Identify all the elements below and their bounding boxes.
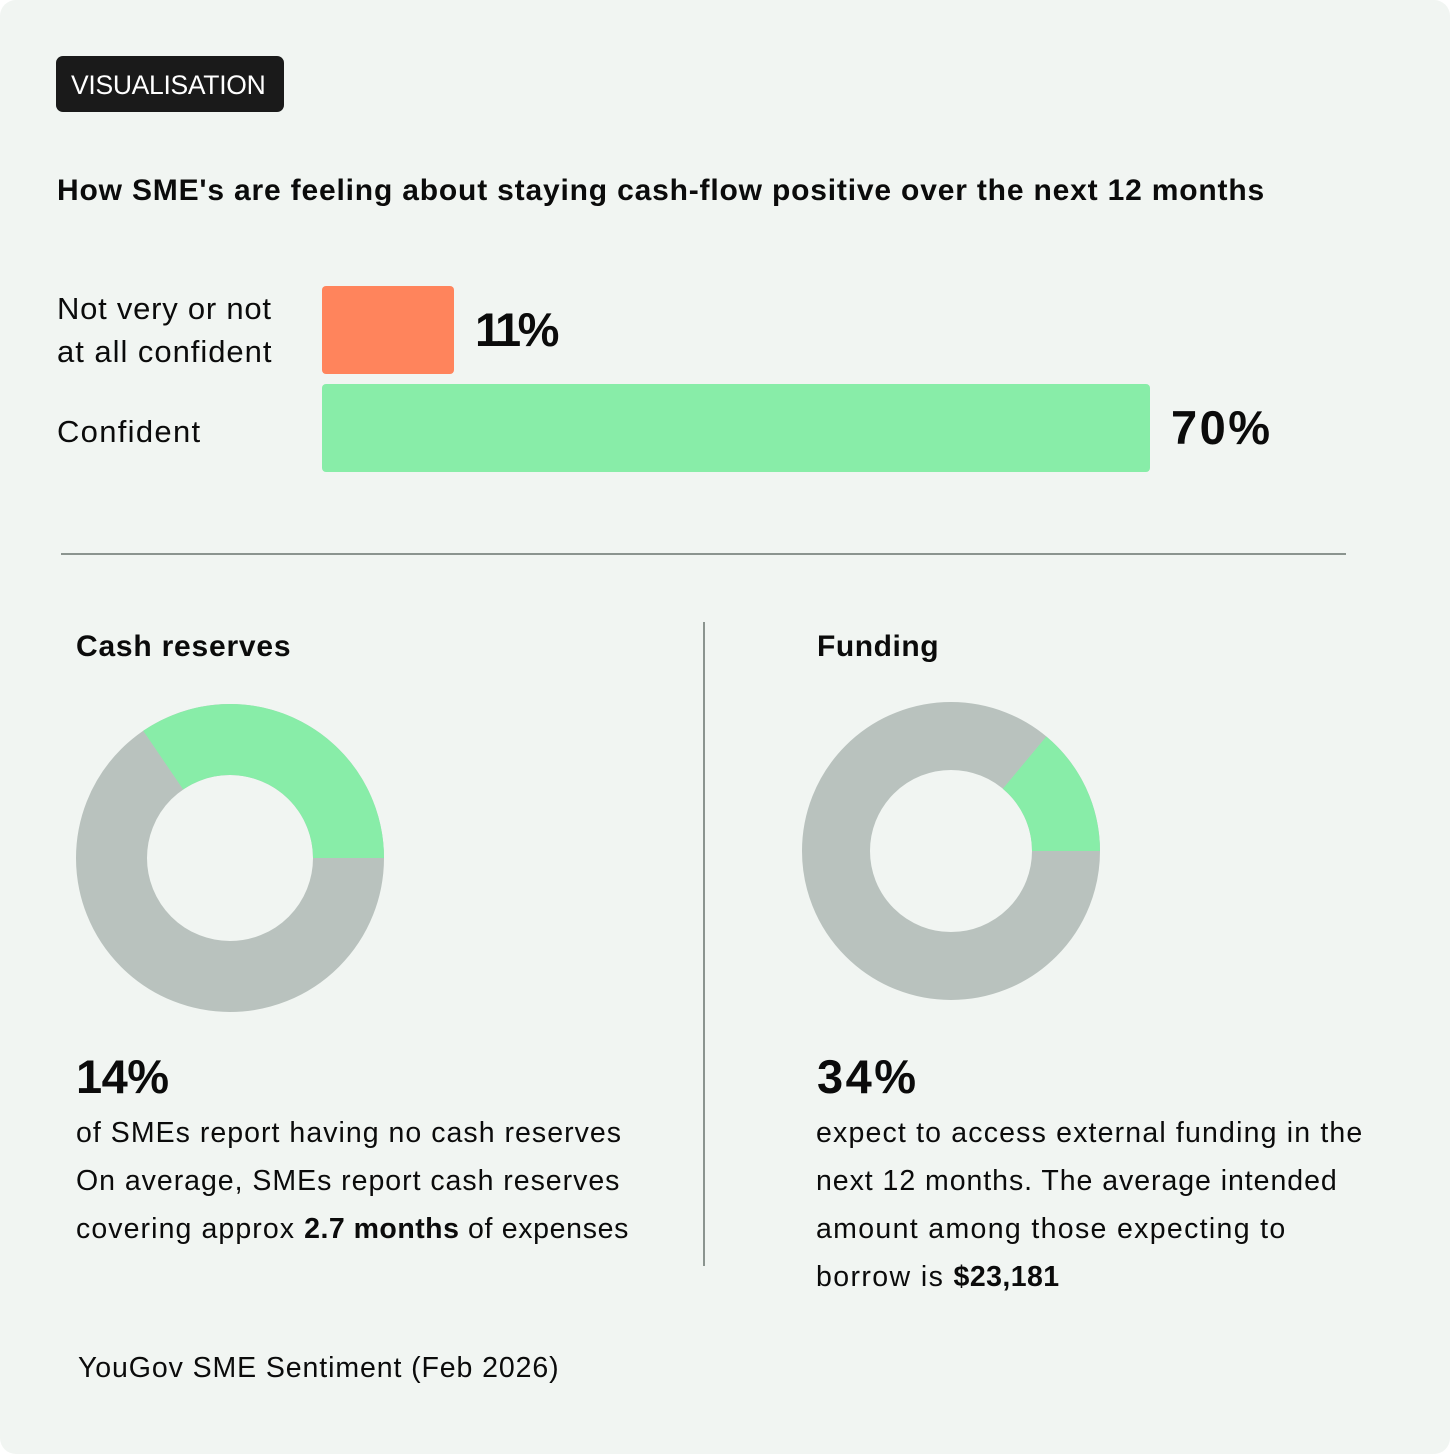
donut chart: cash reserves xyxy=(76,704,384,1012)
bar: not confident xyxy=(322,286,454,374)
value: 11%: 11% xyxy=(475,303,556,356)
text: cash reserves description xyxy=(76,1117,629,1245)
text: funding description: next 12 months. The average intended xyxy=(816,1165,1338,1197)
stat: 34%: 34% xyxy=(817,1050,919,1103)
bar: confident xyxy=(322,384,1150,472)
value: 70%: 70% xyxy=(1171,401,1273,454)
panel: funding xyxy=(802,630,1363,1293)
stat: 14%: 14% xyxy=(76,1050,169,1103)
text: cash reserves description: On average, SMEs report cash reserves xyxy=(76,1165,620,1197)
panel: cash reserves xyxy=(76,630,629,1245)
text: funding description: borrow is $23,181 xyxy=(816,1261,1060,1293)
text: funding description xyxy=(816,1117,1363,1293)
tag: visualisation: VISUALISATION xyxy=(71,70,265,100)
label: not confident: at all confident xyxy=(57,334,272,369)
label: not confident: Not very or not xyxy=(57,291,272,326)
heading: cash reserves: Cash reserves xyxy=(76,630,291,663)
label: confident: Confident xyxy=(57,414,201,449)
label: not confident xyxy=(57,291,272,369)
text: cash reserves description: covering approx 2.7 months of expenses xyxy=(76,1213,629,1245)
heading: funding: Funding xyxy=(817,630,939,663)
tag: visualisation xyxy=(56,56,284,112)
text: cash reserves description: of SMEs report having no cash reserves xyxy=(76,1117,622,1149)
source note: YouGov SME Sentiment (Feb 2026) xyxy=(78,1352,560,1384)
donut chart: funding xyxy=(802,702,1100,1000)
title: How SME's are feeling about staying cash-flow positive over the next 12 months xyxy=(57,174,1265,207)
text: funding description: amount among those expecting to xyxy=(816,1213,1287,1245)
text: funding description: expect to access external funding in the xyxy=(816,1117,1363,1149)
